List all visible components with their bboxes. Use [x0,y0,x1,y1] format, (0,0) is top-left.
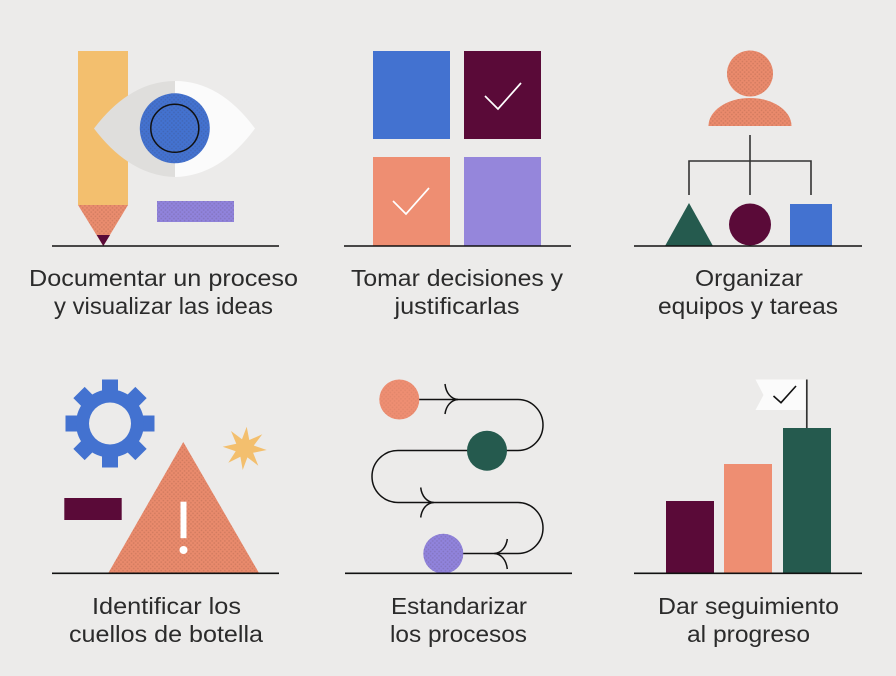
label: y visualizar las ideas [54,293,273,319]
flag [756,380,807,428]
maroon circle [729,204,771,246]
maroon bar [64,498,122,520]
icon: pencil [78,51,128,246]
green triangle [665,203,713,246]
warning triangle [108,442,259,573]
arrowheads [421,384,507,569]
blue square [790,204,832,246]
panel: decisiones [344,51,571,319]
label: Tomar decisiones y [351,265,564,291]
panel: estandarizar [345,380,572,647]
label [658,265,838,319]
panel: documentar [29,51,298,319]
label: Identificar los [92,593,241,619]
icon: person [708,50,792,126]
maroon bar [666,501,714,573]
icon: eye [94,81,255,177]
label: Organizar [695,265,803,291]
label: Dar seguimiento [658,593,839,619]
panel: organizar [634,50,862,319]
icon: gear [66,380,154,468]
purple square [464,157,541,246]
green node [467,431,507,471]
purple node [423,534,463,574]
label [69,593,263,647]
label: justificarlas [393,293,520,319]
label [351,265,564,319]
label: al progreso [687,621,810,647]
icon: star burst [223,427,267,470]
panel: cuellos de botella [52,380,279,647]
winding path [372,400,543,554]
label: Estandarizar [391,593,527,619]
panel: progreso [634,380,862,647]
salmon node [379,380,419,420]
label: cuellos de botella [69,621,263,647]
label [390,593,527,647]
salmon bar [724,464,772,573]
label [658,593,839,647]
label: Documentar un proceso [29,265,298,291]
label: equipos y tareas [658,293,838,319]
label: los procesos [390,621,527,647]
label [29,265,298,319]
checked maroon square [464,51,541,139]
green bar [783,428,831,573]
org chart lines [689,135,811,195]
checked salmon square [373,157,450,246]
blue square [373,51,450,139]
purple bar [157,201,234,222]
